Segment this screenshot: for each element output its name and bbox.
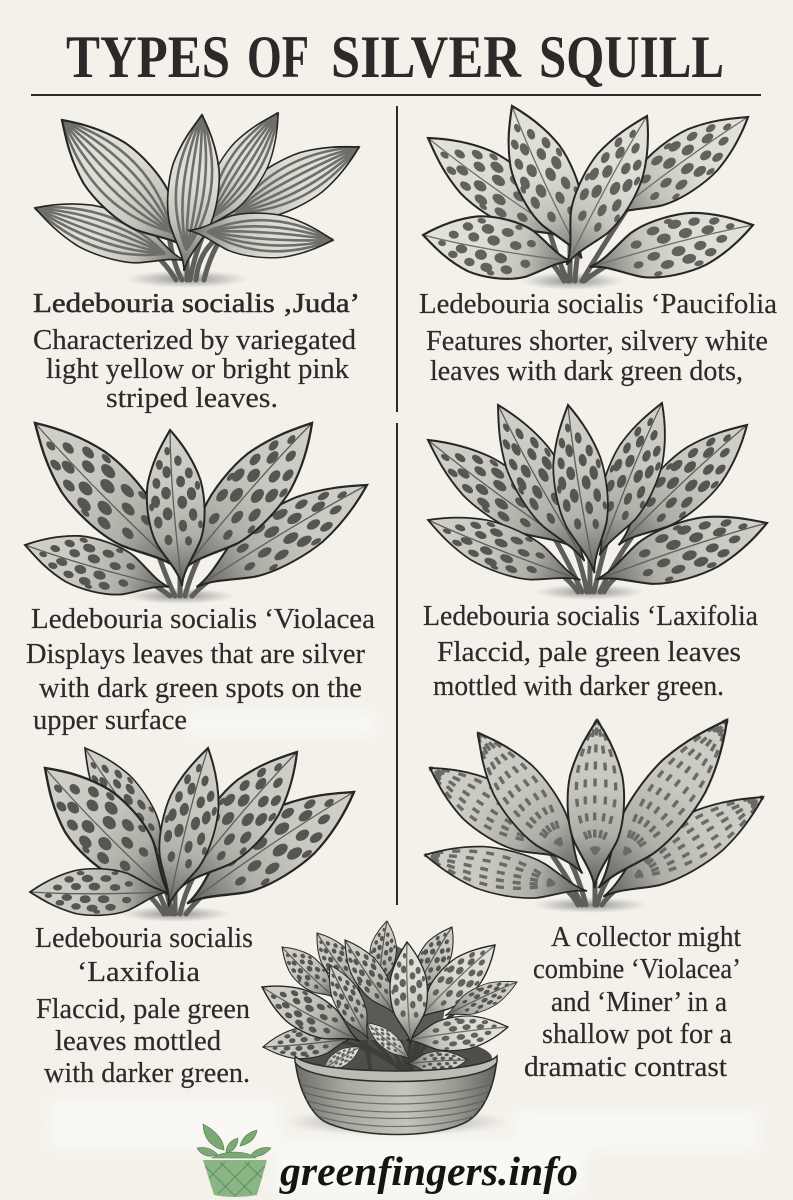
text: Violacea: with dark green spots on the xyxy=(39,673,362,704)
text: Laxifolia left: Ledebouria socialis xyxy=(35,923,253,954)
plant: spotted leaves row three left xyxy=(21,733,371,930)
text: Juda: light yellow or bright pink xyxy=(46,354,349,385)
text: collector note xyxy=(524,922,741,1083)
logo pot xyxy=(203,1160,267,1197)
text: Juda: Ledebouria socialis ‚Juda’ xyxy=(33,288,360,318)
leaves xyxy=(416,702,777,918)
text: collector note: combine ‘Violacea’ xyxy=(533,954,741,985)
text: Paucifolia: Ledebouria socialis ‘Paucifolia xyxy=(419,289,778,320)
potted plant xyxy=(253,919,522,1136)
text: Paucifolia xyxy=(419,289,778,387)
lighter retouched patches xyxy=(50,712,760,1195)
plant: Paucifolia spotted leaves xyxy=(412,94,764,295)
stems xyxy=(150,210,240,280)
leaves xyxy=(12,401,381,612)
pot texture lines xyxy=(300,1084,492,1126)
text: collector note: A collector might xyxy=(551,922,741,953)
plant: Juda striped leaves xyxy=(27,98,370,288)
text: Violacea xyxy=(26,604,376,736)
text: Laxifolia left: leaves mottled xyxy=(55,1026,221,1057)
title: SILVER xyxy=(331,24,522,90)
title: SQUILL xyxy=(539,24,724,90)
text: Laxifolia right: Ledebouria socialis ‘Laxifolia xyxy=(423,601,759,632)
text: collector note: shallow pot for a xyxy=(542,1019,733,1050)
stems xyxy=(145,845,215,914)
text: Laxifolia left: with darker green. xyxy=(44,1058,250,1089)
plant: Laxifolia spotted leaves xyxy=(413,393,776,606)
leaves xyxy=(412,94,764,295)
text: collector note: and ‘Miner’ in a xyxy=(551,987,728,1018)
title xyxy=(66,24,724,90)
text: Juda: Characterized by variegated xyxy=(33,325,356,356)
text: Laxifolia left xyxy=(35,923,253,1089)
stems xyxy=(547,200,633,281)
text: Violacea: Displays leaves that are silver xyxy=(26,639,366,670)
leaves xyxy=(253,919,522,1078)
text: Laxifolia right: Flaccid, pale green leaves xyxy=(437,637,741,668)
title: TYPES xyxy=(66,24,230,90)
vertical divider lower xyxy=(396,423,398,905)
text: Laxifolia left: ‘Laxifolia xyxy=(77,957,201,988)
leaves xyxy=(21,733,371,930)
pot rim xyxy=(295,1056,497,1082)
text: collector note: dramatic contrast xyxy=(524,1052,727,1083)
text: Paucifolia: leaves with dark green dots, xyxy=(430,356,743,387)
title rule xyxy=(31,94,761,96)
text: Laxifolia left: Flaccid, pale green xyxy=(36,994,250,1025)
text: Violacea: upper surface xyxy=(33,705,187,736)
plant: Violacea spotted leaves xyxy=(12,401,381,612)
dark leaf backing xyxy=(335,945,450,1040)
stems xyxy=(545,845,630,905)
footer logo: green pot with leaves xyxy=(197,1124,271,1197)
text: Laxifolia right xyxy=(423,601,759,702)
logo pot weave xyxy=(205,1162,265,1196)
footer site name: greenfingers.info xyxy=(279,1148,578,1194)
stems xyxy=(145,545,225,596)
pot body xyxy=(295,1058,497,1134)
text: Juda xyxy=(33,288,360,414)
leaves xyxy=(413,393,776,606)
leaves xyxy=(27,98,370,283)
logo leaves xyxy=(197,1124,271,1158)
vertical divider upper xyxy=(396,106,398,412)
pot shadow xyxy=(284,1108,508,1136)
stems xyxy=(327,977,457,1068)
text: Juda: striped leaves. xyxy=(106,383,278,414)
stems xyxy=(550,525,640,592)
soil xyxy=(300,1036,492,1080)
text: Violacea: Ledebouria socialis ‘Violacea xyxy=(31,604,376,635)
text: Laxifolia right: mottled with darker green. xyxy=(433,671,724,702)
text: Paucifolia: Features shorter, silvery white xyxy=(426,326,768,357)
plant: mottled dash leaves row three right xyxy=(416,702,777,918)
title: OF xyxy=(247,24,309,90)
